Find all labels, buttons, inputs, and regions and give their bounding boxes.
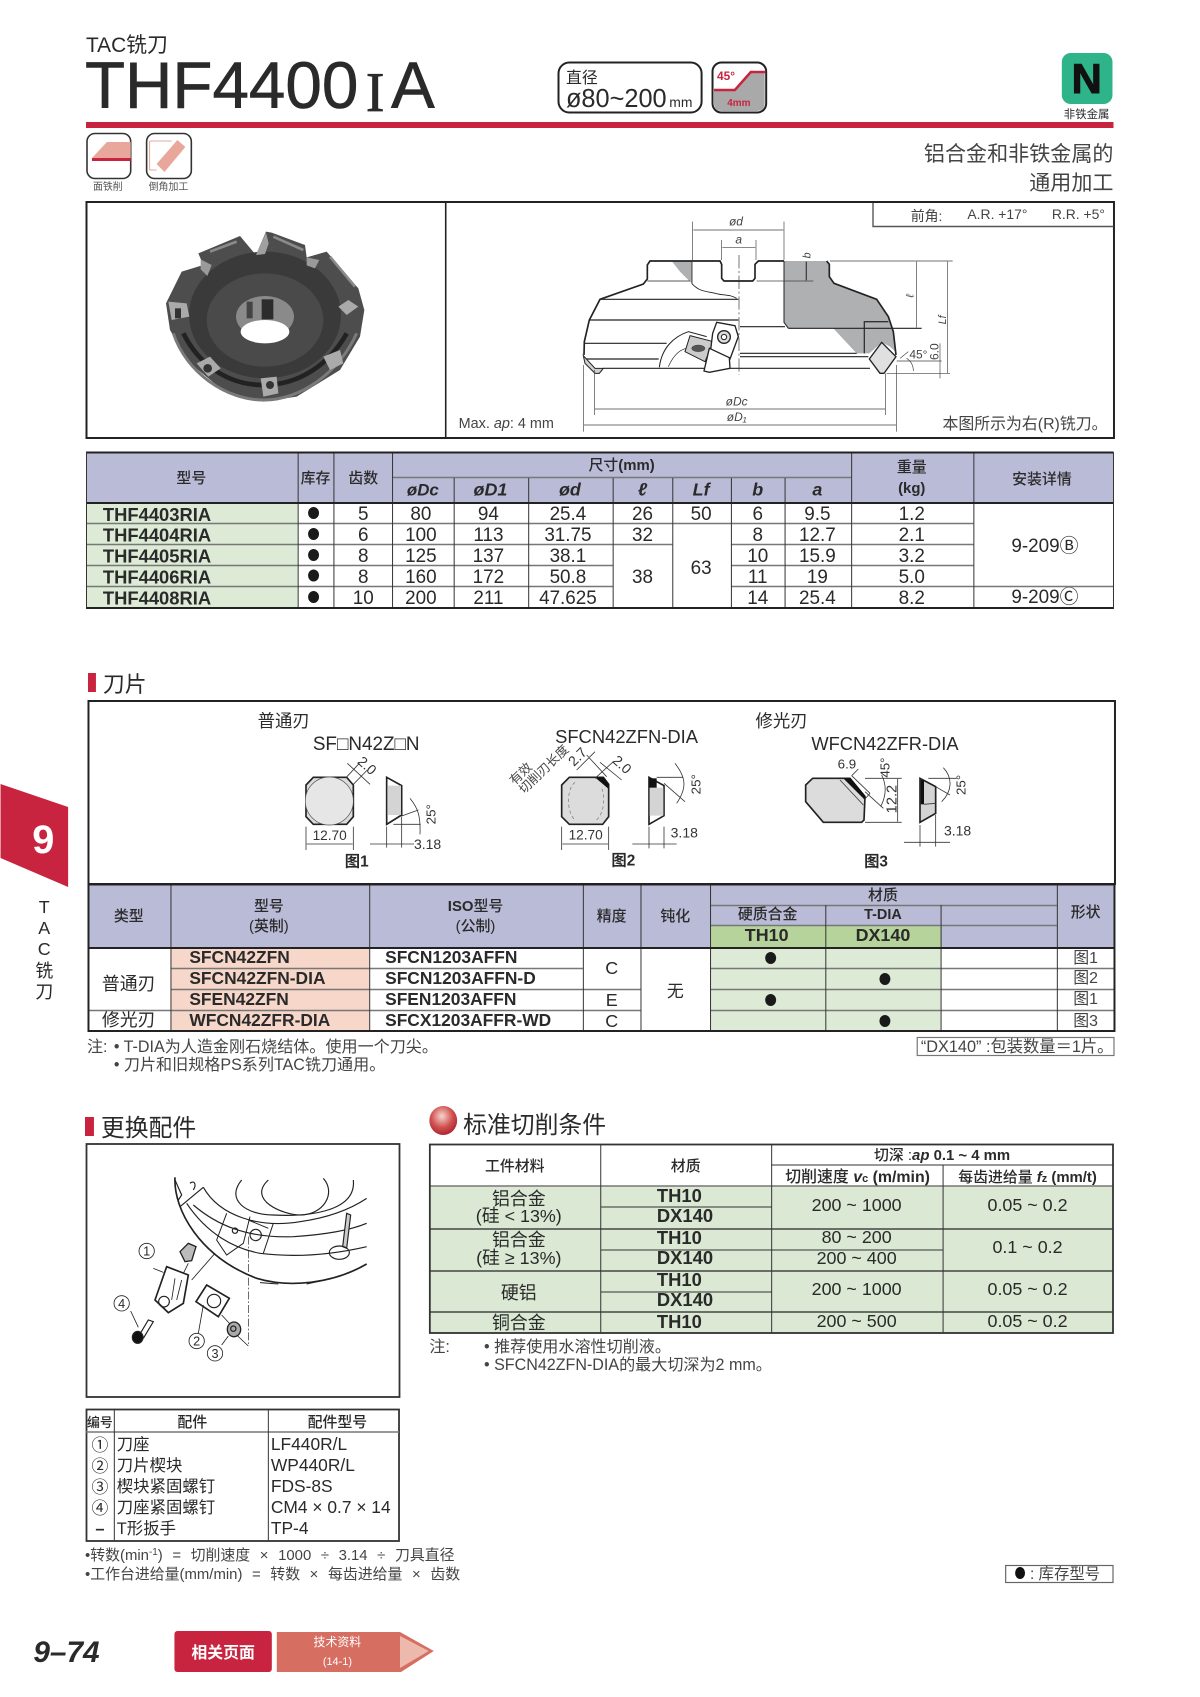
title: THF4400IA: I — [366, 62, 384, 124]
figure 2: diamond tipped insert: 12.70 — [569, 827, 603, 842]
table: cutter dimensions: 9.5 — [804, 504, 830, 525]
table: cutter dimensions: ød — [559, 479, 582, 500]
insert notes: 注: — [87, 1038, 108, 1056]
table: cutter dimensions: 5.0 — [899, 567, 925, 588]
table: cutter dimensions: b — [752, 479, 763, 500]
table: insert specification: 精度 — [597, 908, 627, 925]
table: cutter dimensions: 10 — [353, 588, 374, 609]
icon: N non-ferrous metal — [1062, 53, 1112, 121]
table: cutting conditions: 0.05 ~ 0.2 — [988, 1279, 1068, 1299]
technical drawing: cutter section: øDc — [726, 395, 748, 409]
header background — [88, 885, 1114, 948]
table: cutter dimensions: 50.8 — [550, 567, 586, 588]
figure 3: wiper insert: 45° — [877, 758, 892, 778]
badge: diameter range — [559, 62, 702, 113]
rake angle box: 前角: — [911, 208, 942, 224]
insert rows: SFCN1203AFFN-D — [385, 968, 536, 988]
table: cutting conditions: 工件材料 — [485, 1158, 545, 1175]
icon: 45 degree 4mm approach: 45° — [717, 69, 735, 83]
table: replacement parts list: FDS-8S — [271, 1476, 333, 1496]
table: cutting conditions: TH10 — [657, 1311, 702, 1332]
side tab: chapter 9: C — [38, 939, 51, 959]
drawing notes: 本图所示为右(R)铣刀。 — [942, 415, 1108, 433]
table: replacement parts list: ② — [91, 1457, 108, 1476]
figure 1: standard insert — [305, 753, 441, 871]
table: insert specification: 类型 — [114, 908, 144, 925]
table: cutter dimensions: 100 — [405, 525, 437, 546]
icon: face milling — [87, 134, 131, 193]
table: cutter dimensions: 齿数 — [348, 470, 378, 487]
figure 2: diamond tipped insert: 25° — [689, 774, 704, 794]
table: cutting conditions: 切削速度 vc (m/min) — [785, 1167, 930, 1186]
panel: insert drawings frame: 普通刃 — [258, 711, 310, 731]
table: cutter dimensions: 2.1 — [899, 525, 925, 546]
icon: 45 degree 4mm approach — [713, 62, 766, 112]
technical drawing: cutter section: Lf — [937, 314, 949, 324]
table: cutter dimensions: 125 — [405, 546, 437, 567]
figure 3: wiper insert: 图3 — [864, 854, 888, 871]
button: technical data arrow: (14-1) — [323, 1656, 352, 1668]
table: cutter dimensions: 型号 — [176, 470, 206, 487]
formula notes: -1 — [149, 1547, 158, 1558]
button: related pages: 相关页面 — [191, 1643, 255, 1662]
insert rows: 修光刃 — [102, 1010, 156, 1030]
table: cutting conditions: 200 ~ 1000 — [812, 1279, 902, 1299]
insert rows: SFEN42ZFN — [189, 989, 289, 1009]
panel: insert drawings frame: SF□N42Z□N — [313, 734, 420, 755]
button: technical data arrow — [277, 1632, 434, 1672]
panel: exploded parts drawing: 3 — [211, 1347, 219, 1361]
table: cutter dimensions: 8 — [752, 525, 763, 546]
insert rows: 普通刃 — [102, 974, 156, 994]
button: related pages — [174, 1631, 272, 1672]
material rows: (硅 ≥ 13%) — [476, 1248, 561, 1268]
table: cutting conditions — [429, 1144, 1113, 1333]
table: replacement parts list: WP440R/L — [271, 1455, 355, 1475]
insert rows: C — [605, 958, 618, 978]
dimensions — [583, 222, 953, 432]
technical drawing: cutter section: ød — [729, 215, 743, 229]
technical drawing: cutter section: øD₁ — [727, 410, 747, 424]
heading: standard cutting conditions — [429, 1106, 606, 1139]
center line — [738, 255, 740, 375]
figure 2: diamond tipped insert: 切削刃长度 — [516, 742, 572, 796]
panel: insert drawings frame: 修光刃 — [756, 711, 808, 731]
table rows — [103, 504, 211, 609]
model column fill — [86, 503, 298, 608]
table: cutter dimensions: 10 — [747, 546, 768, 567]
figure 3: wiper insert: 6.9 — [838, 756, 856, 771]
table rows: THF4406RIA — [103, 566, 211, 588]
table: cutting conditions: 切深 :ap 0.1 ~ 4 mm — [874, 1147, 1010, 1164]
table: cutter dimensions: 6 — [358, 525, 368, 546]
table: cutter dimensions: 211 — [473, 588, 504, 609]
application text: 通用加工 — [1029, 171, 1113, 195]
table: replacement parts list: ③ — [91, 1478, 108, 1497]
insert rows — [102, 947, 1098, 1031]
icon: chamfering — [147, 134, 191, 193]
formula notes: ) = 切削速度 × 1000 ÷ 3.14 ÷ 刀具直径 — [158, 1547, 455, 1564]
table: replacement parts list: ④ — [91, 1499, 108, 1518]
table: cutter dimensions: 50 — [691, 504, 712, 525]
stock legend box: : 库存型号 — [1030, 1565, 1100, 1583]
green data area — [429, 1186, 1113, 1333]
red header rule — [86, 122, 1113, 128]
table: replacement parts list: T形扳手 — [117, 1519, 176, 1538]
figure 3: wiper insert: 12.2 — [885, 785, 901, 813]
panel: exploded parts drawing: 2 — [193, 1335, 200, 1349]
figure 2: diamond tipped insert: 图2 — [611, 853, 635, 870]
figure 2: diamond tipped insert: 2.7 — [565, 744, 590, 769]
material rows: 硬铝 — [501, 1283, 537, 1303]
table: cutter dimensions: 14 — [747, 588, 768, 609]
table: cutting conditions: 0.1 ~ 0.2 — [992, 1237, 1063, 1257]
button: technical data arrow: 技术资料 — [314, 1635, 361, 1649]
side tab: chapter 9: 铣 — [35, 961, 53, 981]
cutting notes — [429, 1338, 772, 1374]
panel: insert drawings frame — [88, 701, 1115, 884]
table: cutting conditions: DX140 — [657, 1289, 713, 1310]
panel: product photo and drawing frame — [86, 202, 1114, 438]
material rows — [476, 1189, 562, 1333]
figure 1: standard insert: 图1 — [345, 854, 369, 871]
figure 1: standard insert: 25° — [424, 804, 439, 824]
insert rows: WFCN42ZFR-DIA — [189, 1010, 331, 1030]
table: cutting conditions: 每齿进给量 fz (mm/t) — [958, 1169, 1097, 1186]
table: cutter dimensions: 137 — [473, 546, 504, 567]
side tab: chapter 9: 9 — [32, 818, 54, 862]
insert rows: SFEN1203AFFN — [385, 989, 516, 1009]
technical drawing: cutter section: a — [735, 233, 742, 247]
material rows: 铜合金 — [492, 1313, 546, 1333]
table: insert specification: 型号 — [254, 898, 284, 915]
material rows: (硅 < 13%) — [476, 1206, 562, 1226]
figure 2: diamond tipped insert: 2.0 — [610, 752, 635, 777]
insert rows: SFCN42ZFN — [189, 947, 290, 967]
technical drawing: cutter section — [583, 215, 953, 432]
table: cutter dimensions: 12.7 — [799, 525, 836, 546]
table: cutting conditions: TH10 — [657, 1269, 702, 1290]
rake angle box: R.R. +5° — [1052, 206, 1105, 222]
badge: diameter range: 直径 — [566, 69, 598, 87]
table: replacement parts list: – — [95, 1520, 104, 1538]
table: cutting conditions: 200 ~ 500 — [817, 1311, 897, 1331]
title: THF4400IA: THF4400 — [85, 48, 358, 122]
cutting notes: • SFCN42ZFN-DIA的最大切深为2 mm。 — [484, 1356, 772, 1374]
table: cutter dimensions: ℓ — [638, 479, 648, 500]
table: cutter dimensions: 15.9 — [799, 546, 836, 567]
technical drawing: cutter section: ℓ — [904, 294, 916, 299]
photo: milling cutter — [166, 232, 364, 402]
application text — [924, 142, 1113, 195]
table: cutter dimensions: 32 — [632, 525, 653, 546]
panel: insert drawings frame: WFCN42ZFR-DIA — [811, 733, 959, 754]
rake angle box: A.R. +17° — [967, 206, 1027, 222]
panel: exploded parts drawing — [86, 1144, 400, 1397]
side tab: chapter 9: A — [38, 918, 50, 938]
insert notes — [87, 1038, 438, 1074]
icon: N non-ferrous metal: N — [1072, 55, 1102, 102]
table: insert specification: (英制) — [249, 918, 289, 935]
table: insert specification: TH10 — [745, 925, 789, 945]
table: replacement parts list: LF440R/L — [271, 1434, 347, 1454]
gray section — [784, 261, 895, 353]
insert rows: 图1 — [1073, 991, 1098, 1008]
table rows: THF4408RIA — [103, 587, 211, 609]
table: cutter dimensions: 8 — [358, 567, 368, 588]
subtitle: TAC milling cutter: TAC铣刀 — [86, 34, 168, 57]
table: replacement parts list — [86, 1409, 399, 1541]
inserts — [869, 342, 896, 373]
table: replacement parts list: ① — [91, 1436, 108, 1455]
table: replacement parts list: TP-4 — [271, 1518, 309, 1538]
drawing notes: Max. ap: 4 mm — [459, 416, 554, 432]
panel: insert drawings frame: SFCN42ZFN-DIA — [555, 726, 699, 747]
table: cutting conditions: DX140 — [657, 1247, 713, 1268]
table: cutter dimensions — [86, 452, 1113, 609]
table: replacement parts list: CM4 × 0.7 × 14 — [271, 1497, 391, 1517]
table: insert specification: 钝化 — [660, 908, 690, 925]
figure 3: wiper insert: 3.18 — [944, 823, 971, 839]
table: cutter dimensions: 6 — [752, 504, 763, 525]
figure 3: wiper insert: 25° — [954, 775, 969, 795]
table: replacement parts list: 配件 — [177, 1414, 207, 1431]
figure 1: standard insert: 3.18 — [414, 836, 441, 852]
icon: 45 degree 4mm approach: 4mm — [727, 98, 751, 109]
figure 1: standard insert: 12.70 — [313, 828, 347, 843]
icon: chamfering: 倒角加工 — [149, 181, 188, 193]
table: cutter dimensions: 31.75 — [544, 525, 592, 546]
table: cutting conditions: 0.05 ~ 0.2 — [988, 1195, 1068, 1215]
table: cutter dimensions: 1.2 — [899, 504, 925, 525]
table rows: THF4404RIA — [103, 524, 211, 546]
panel: exploded parts drawing: 4 — [118, 1297, 125, 1311]
table: cutter dimensions: 19 — [807, 567, 828, 588]
table: cutter dimensions: 80 — [410, 504, 431, 525]
insert notes: • 刀片和旧规格PS系列TAC铣刀通用。 — [114, 1056, 385, 1074]
heading: standard cutting conditions: 标准切削条件 — [463, 1112, 606, 1139]
table: cutter dimensions: Lf — [693, 479, 712, 500]
figure 3: wiper insert — [806, 756, 971, 871]
insert rows: 图2 — [1073, 970, 1098, 987]
insert rows: 图1 — [1073, 950, 1098, 967]
application text: 铝合金和非铁金属的 — [924, 142, 1113, 166]
formula notes: •工作台进给量(mm/min) = 转数 × 每齿进给量 × 齿数 — [85, 1566, 460, 1583]
table: insert specification: 形状 — [1071, 904, 1101, 921]
table: cutter dimensions: 安装详情 — [1012, 471, 1072, 488]
table: replacement parts list: 刀片楔块 — [117, 1457, 182, 1475]
figure 2: diamond tipped insert — [507, 742, 704, 870]
table: cutter dimensions: 26 — [632, 504, 653, 525]
table: cutter dimensions: 8 — [358, 546, 368, 567]
table: cutter dimensions: 160 — [405, 567, 437, 588]
heading: inserts: 刀片 — [103, 672, 147, 697]
figure 2: diamond tipped insert: 3.18 — [671, 825, 698, 841]
table: cutting conditions: DX140 — [657, 1205, 713, 1226]
body outline — [584, 261, 896, 355]
table: cutter dimensions: 38.1 — [550, 546, 586, 567]
table: insert specification: DX140 — [856, 925, 910, 945]
table: cutter dimensions: 9-209Ⓒ — [1011, 586, 1079, 608]
table header background — [86, 453, 1113, 503]
table rows: THF4405RIA — [103, 545, 211, 567]
drawing notes — [459, 415, 1108, 433]
icon: face milling: 面铁削 — [93, 180, 123, 193]
material rows: 铝合金 — [492, 1189, 546, 1209]
page number: 9–74 — [33, 1636, 100, 1669]
table: cutting conditions: TH10 — [657, 1227, 702, 1248]
table: cutter dimensions: 94 — [478, 504, 499, 525]
table: insert specification: 硬质合金 — [738, 905, 798, 923]
insert rows: E — [606, 990, 618, 1010]
stock legend box — [1006, 1565, 1113, 1583]
insert rows: 无 — [667, 982, 684, 1001]
side tab: chapter 9 — [1, 784, 68, 1002]
rake angle box — [873, 203, 1113, 226]
table rows: THF4403RIA — [103, 504, 211, 525]
title: THF4400IA: A — [391, 48, 435, 122]
table: cutting conditions: 80 ~ 200 — [822, 1227, 892, 1247]
panel: exploded parts drawing: 1 — [143, 1245, 150, 1259]
cutaway insert assembly — [659, 332, 707, 367]
table: cutter dimensions: 25.4 — [550, 504, 586, 525]
insert rows: SFCN42ZFN-DIA — [189, 968, 326, 988]
table: cutter dimensions: 3.2 — [899, 546, 925, 567]
table: replacement parts list: 配件型号 — [308, 1414, 367, 1431]
table: cutter dimensions: 172 — [473, 567, 504, 588]
table: insert specification: (公制) — [456, 918, 495, 935]
figure 2: diamond tipped insert: 有效 — [507, 760, 535, 788]
formula notes — [85, 1547, 460, 1583]
table: cutter dimensions: 47.625 — [539, 588, 597, 609]
table: cutter dimensions: 9-209Ⓑ — [1011, 535, 1079, 557]
table: replacement parts list: 刀座紧固螺钉 — [117, 1499, 215, 1517]
table: replacement parts list: 刀座 — [117, 1436, 150, 1454]
heading: replacement parts: 更换配件 — [101, 1115, 196, 1142]
badge: diameter range: ø80~200 — [566, 85, 667, 113]
table: cutter dimensions: 重量 — [897, 459, 927, 476]
table: cutter dimensions: 5 — [358, 504, 368, 525]
cutting notes: • 推荐使用水溶性切削液。 — [484, 1338, 671, 1356]
table: cutter dimensions: øDc — [407, 480, 439, 500]
table: cutter dimensions: øD1 — [474, 479, 507, 500]
material rows: 铝合金 — [492, 1230, 546, 1250]
insert rows: C — [605, 1011, 618, 1031]
table: cutter dimensions: 200 — [405, 588, 437, 609]
table: replacement parts list: 编号 — [87, 1415, 113, 1430]
table: cutting conditions: 材质 — [671, 1158, 701, 1175]
side tab: chapter 9: 刀 — [35, 982, 53, 1002]
table: replacement parts list: 楔块紧固螺钉 — [117, 1478, 215, 1496]
table: cutter dimensions: 63 — [691, 558, 712, 579]
cutting notes: 注: — [429, 1338, 450, 1356]
table: insert specification: T-DIA — [864, 907, 902, 923]
table: cutter dimensions: 尺寸(mm) — [589, 457, 655, 474]
icon: N non-ferrous metal: 非铁金属 — [1064, 107, 1109, 121]
table: cutting conditions: 200 ~ 400 — [817, 1248, 897, 1268]
table: cutting conditions: TH10 — [657, 1185, 702, 1206]
technical drawing: cutter section: b — [802, 252, 814, 258]
side tab: chapter 9: T — [39, 897, 50, 917]
table: cutter dimensions: (kg) — [898, 480, 925, 497]
table: cutter dimensions: 库存 — [301, 470, 330, 487]
formula notes: •转数(min — [85, 1547, 149, 1564]
insert rows: 图3 — [1073, 1013, 1098, 1030]
table: cutter dimensions: a — [812, 479, 822, 500]
table: cutting conditions: 0.05 ~ 0.2 — [988, 1311, 1068, 1331]
figure 1: standard insert: 2.0 — [355, 753, 380, 778]
insert rows: SFCN1203AFFN — [385, 947, 517, 967]
table: insert specification: 材质 — [868, 887, 898, 904]
table: cutter dimensions: 113 — [473, 525, 504, 546]
table: cutting conditions: 200 ~ 1000 — [812, 1195, 902, 1215]
table: cutter dimensions: 8.2 — [899, 588, 925, 609]
insert notes: • T-DIA为人造金刚石烧结体。使用一个刀尖。 — [114, 1038, 438, 1056]
table: insert specification — [88, 884, 1114, 1032]
technical drawing: cutter section: 6.0 — [927, 343, 941, 360]
grade columns — [710, 925, 941, 948]
table: cutter dimensions: 25.4 — [799, 588, 836, 609]
table: cutter dimensions: 11 — [748, 567, 768, 588]
badge: diameter range: mm — [669, 94, 692, 110]
table: insert specification: ISO型号 — [448, 898, 503, 915]
packing note box: “DX140” :包装数量＝1片。 — [921, 1038, 1113, 1056]
table: cutter dimensions: 38 — [632, 567, 653, 588]
technical drawing: cutter section: 45° — [909, 347, 928, 361]
insert rows: SFCX1203AFFR-WD — [385, 1010, 551, 1030]
